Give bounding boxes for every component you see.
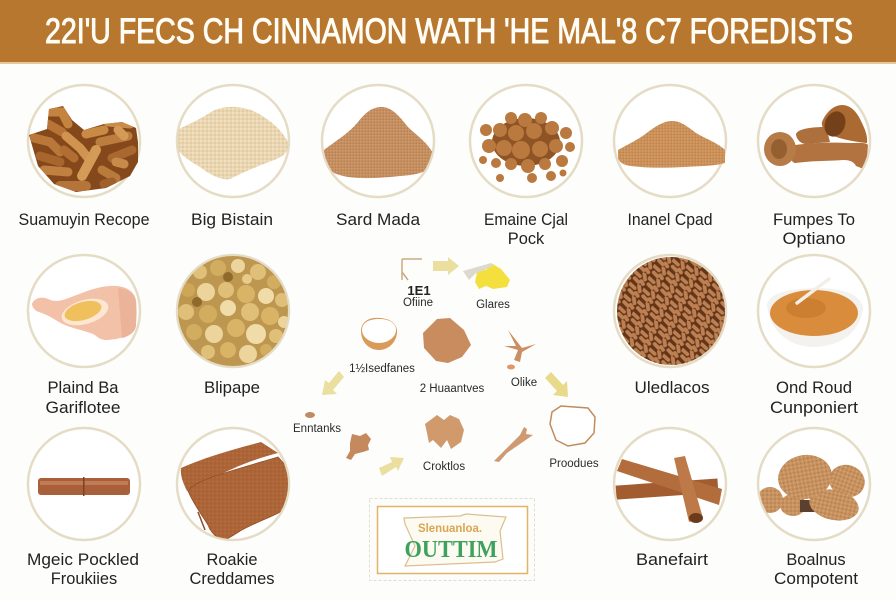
icon: stick — [494, 427, 533, 462]
step label: Glares: Glares — [476, 299, 510, 311]
panel: Blipape: Blipape — [204, 379, 260, 397]
panel: Emaine Cjal Pock: Pock — [508, 230, 545, 248]
step label: Croktlos: Croktlos — [423, 461, 465, 473]
step label: Huaantves: 2 Huaantves — [420, 383, 485, 395]
panel: Big Bistain: Big Bistain — [191, 211, 273, 229]
panel: Ond Roud Cunponiert: Ond Roud — [776, 379, 852, 397]
panel: Emaine Cjal Pock — [470, 85, 582, 248]
icon: small smear — [305, 412, 315, 418]
panel: Sard Mada — [322, 85, 434, 229]
icon: sprig — [504, 330, 536, 370]
icon: white box — [550, 406, 595, 446]
step label: 1E1 Ofiine — [403, 283, 433, 309]
step label: 1E1 Ofiine: Ofiine — [403, 297, 433, 309]
step label: Isedfanes: 1½Isedfanes — [349, 363, 415, 375]
panel: Uledlacos — [614, 255, 726, 397]
panel: Big Bistain — [176, 85, 289, 229]
panel: Boalnus Compotent — [757, 428, 870, 588]
stamp: logo badge: OUTTIM — [404, 537, 498, 563]
panel: Roakie Creddames — [177, 428, 289, 588]
panel: Sard Mada: Sard Mada — [336, 211, 421, 229]
panel: Banefairt — [614, 428, 726, 569]
stamp: logo badge: Slenuanloa. — [418, 521, 482, 535]
panel: Plaind Ba Gariflotee — [28, 255, 140, 417]
panel: Roakie Creddames: Creddames — [190, 570, 274, 588]
panel: Suamuyin Recope: Suamuyin Recope — [18, 211, 150, 229]
icon: brown powder — [423, 318, 471, 363]
arrow: lower left — [322, 371, 344, 395]
panel: Plaind Ba Gariflotee: Plaind Ba — [48, 379, 119, 397]
panel: Uledlacos: Uledlacos — [634, 379, 710, 397]
panel: Boalnus Compotent: Compotent — [774, 570, 858, 588]
icon: yellow pieces — [463, 263, 510, 289]
panel: Emaine Cjal Pock: Emaine Cjal — [484, 211, 568, 229]
panel: Banefairt: Banefairt — [636, 551, 708, 569]
process cycle diagram — [293, 257, 599, 476]
step label: Olike: Olike — [511, 377, 537, 389]
icon: document — [402, 259, 422, 280]
arrow: top — [433, 257, 459, 275]
step label: 1E1 Ofiine: 1E1 — [407, 283, 431, 298]
panel: Mgeic Pockled Froukiies — [27, 428, 140, 588]
panel: Boalnus Compotent: Boalnus — [786, 551, 846, 569]
panel: Suamuyin Recope — [18, 85, 150, 229]
step label: Enntanks: Enntanks — [293, 423, 341, 435]
panel: Plaind Ba Gariflotee: Gariflotee — [46, 399, 120, 417]
arrow: to cinnamon — [379, 457, 404, 476]
title banner — [0, 0, 896, 64]
panel: Fumpes To Optiano: Fumpes To — [773, 211, 855, 229]
step label: Proodues: Proodues — [549, 458, 599, 470]
panel: Inanel Cpad: Inanel Cpad — [628, 211, 712, 229]
panel: Fumpes To Optiano: Optiano — [782, 230, 846, 248]
arrow: lower right — [545, 372, 568, 397]
panel: Roakie Creddames: Roakie — [206, 551, 258, 569]
panel: Mgeic Pockled Froukiies: Mgeic Pockled — [27, 551, 139, 569]
icon: spiky cinnamon — [425, 415, 464, 449]
icon: bread — [361, 318, 397, 350]
stamp: logo badge — [370, 498, 534, 580]
panel: Fumpes To Optiano — [758, 85, 870, 248]
panel: Mgeic Pockled Froukiies: Froukiies — [51, 570, 117, 588]
panel: Ond Roud Cunponiert — [758, 255, 870, 417]
panel: Inanel Cpad — [614, 85, 726, 229]
panel: Blipape — [176, 254, 290, 397]
icon: brown blob — [346, 433, 371, 460]
panel: Ond Roud Cunponiert: Cunponiert — [770, 399, 858, 417]
